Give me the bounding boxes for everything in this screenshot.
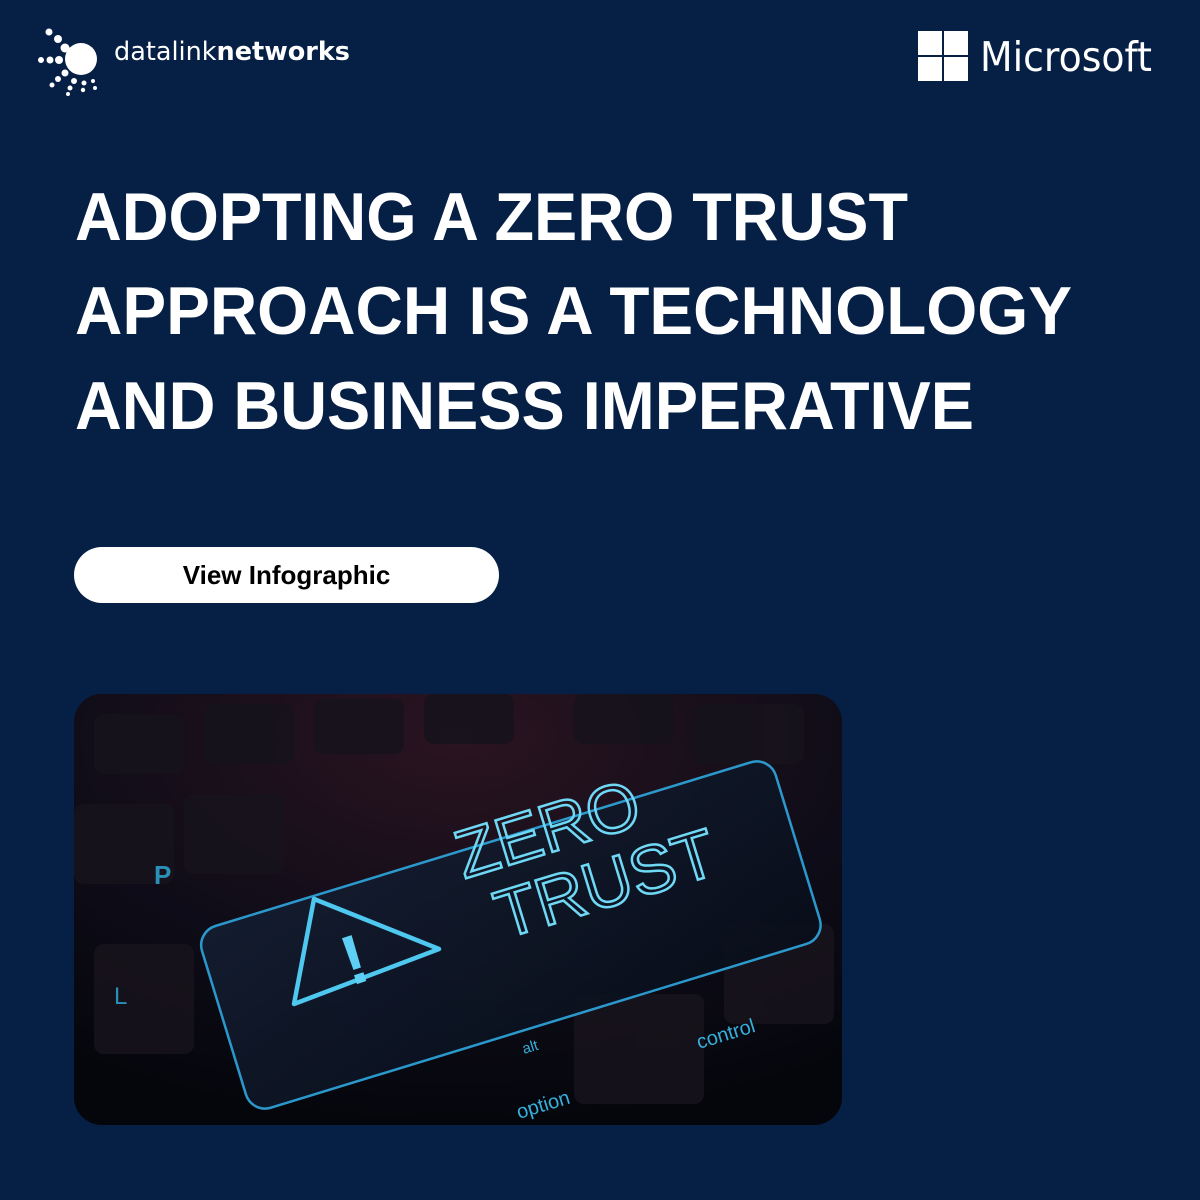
title: APPROACH IS A TECHNOLOGY (75, 273, 1072, 349)
button: View Infographic (74, 547, 499, 603)
photo: zero trust keyboard (74, 694, 842, 1125)
logo: datalink networks (38, 28, 350, 96)
photo: zero trust keyboard: control (694, 1015, 758, 1054)
title: ADOPTING A ZERO TRUST (75, 180, 908, 255)
photo: zero trust keyboard: P (154, 860, 171, 890)
key label (446, 765, 725, 953)
logo: Microsoft (918, 31, 1152, 81)
wordmark: datalinknetworks (114, 37, 350, 67)
key label: TRUST (486, 814, 725, 953)
warning triangle (294, 899, 439, 1004)
photo: zero trust keyboard: option (514, 1087, 573, 1124)
photo: zero trust keyboard: alt (520, 1037, 541, 1058)
icon: windows squares (918, 31, 968, 81)
glowing key (196, 756, 826, 1114)
icon: dots sun (38, 28, 97, 96)
photo: zero trust keyboard: ! (331, 919, 377, 1000)
title (75, 180, 1072, 440)
key label: ZERO (446, 765, 649, 893)
photo: zero trust keyboard: L (114, 983, 127, 1010)
button: View Infographic: View Infographic (183, 560, 390, 590)
